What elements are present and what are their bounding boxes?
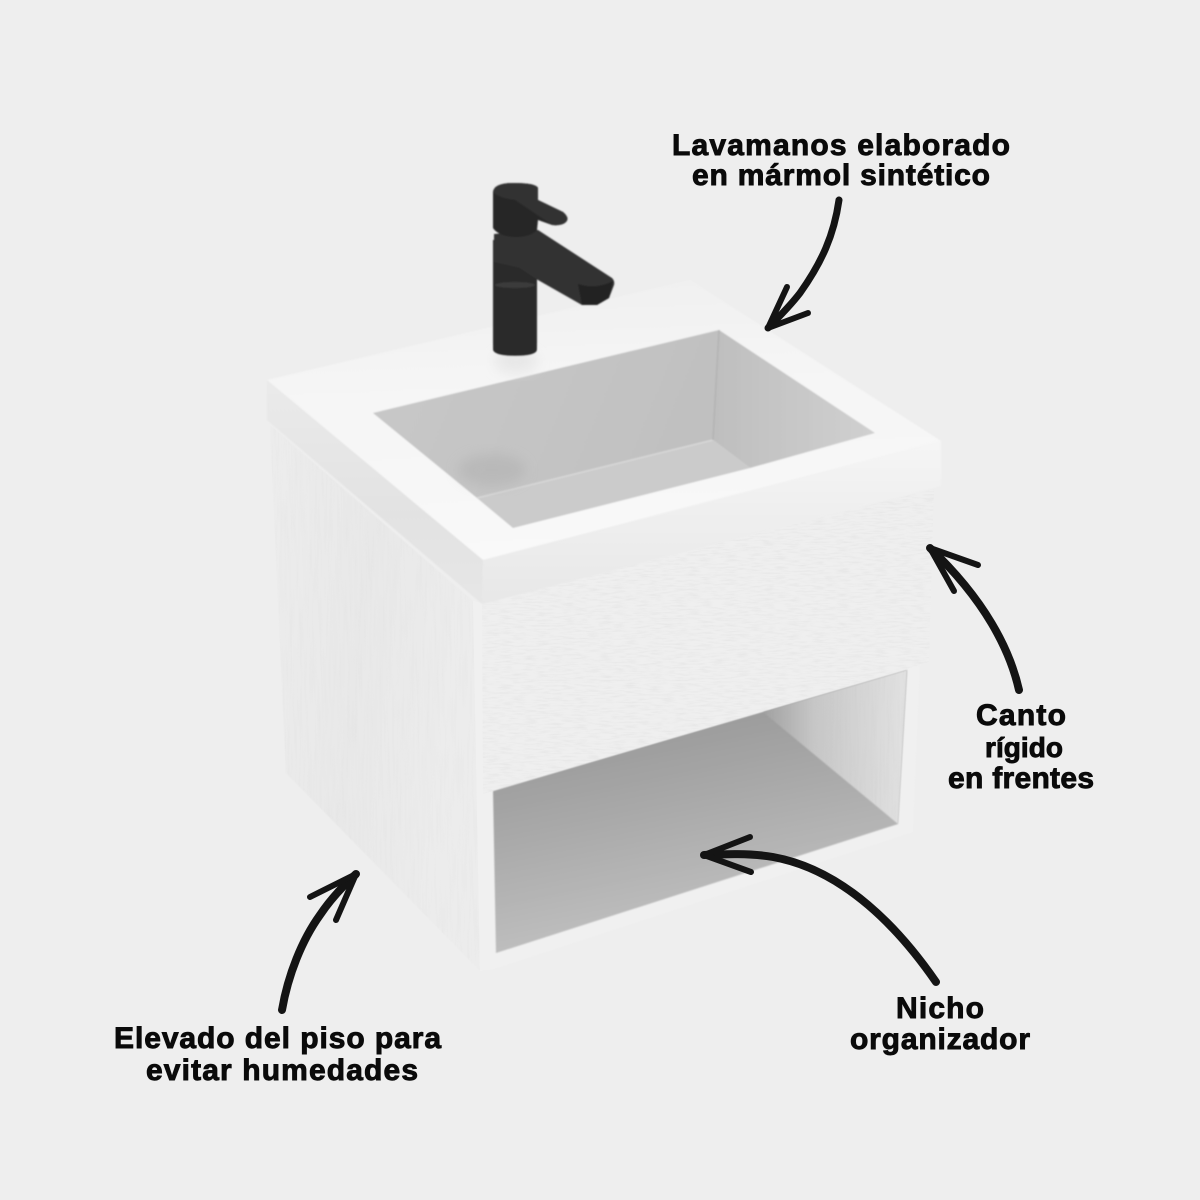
label: rigid edge: rígido (985, 732, 1063, 763)
label: basin material: Lavamanos elaborado (672, 129, 1010, 162)
label: niche: Nicho (896, 992, 984, 1025)
cabinet side panel (270, 425, 491, 971)
basin right wall (713, 330, 875, 468)
arrow: to rigid edge (930, 548, 1019, 690)
basin back wall (373, 330, 719, 498)
label: niche (850, 992, 1030, 1056)
basin floor (477, 440, 750, 528)
label: rigid edge: en frentes (948, 762, 1094, 795)
vanity cabinet illustration (267, 183, 941, 971)
arrow: to marble basin (768, 200, 839, 328)
drawer front (482, 489, 934, 794)
black faucet (493, 183, 614, 374)
label: raised from floor (114, 1022, 441, 1087)
label: rigid edge: Canto (976, 699, 1066, 732)
basin drain shadow (458, 454, 526, 486)
arrow: to niche (704, 837, 936, 982)
label: niche: organizador (850, 1023, 1030, 1056)
label: rigid edge (948, 699, 1094, 795)
label: basin material (672, 129, 1010, 192)
label: basin material: en mármol sintético (692, 159, 990, 192)
label: raised from floor: Elevado del piso para (114, 1022, 441, 1055)
marble basin top (267, 280, 941, 604)
open niche (480, 665, 920, 970)
label: raised from floor: evitar humedades (146, 1054, 418, 1087)
arrow: to raised base (282, 874, 356, 1010)
